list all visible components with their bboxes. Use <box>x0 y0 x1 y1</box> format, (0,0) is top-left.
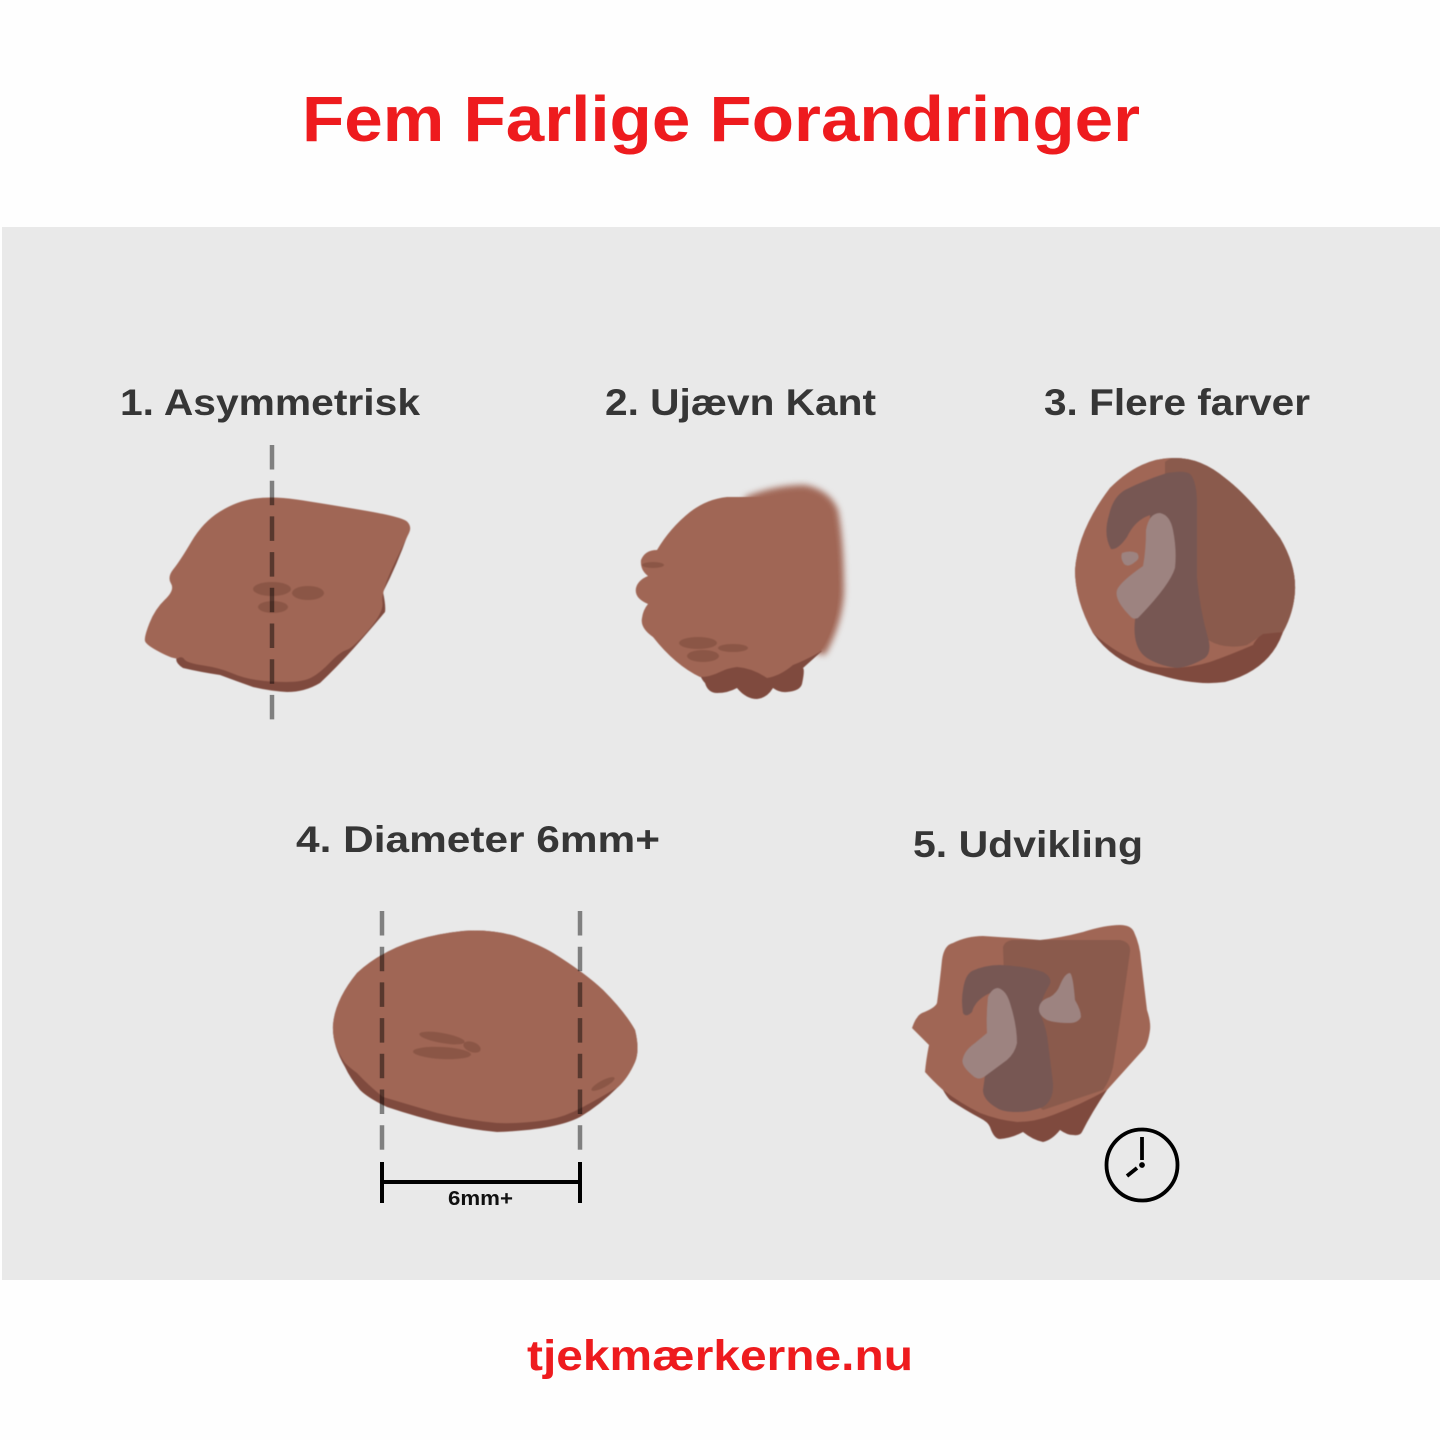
grey panel <box>2 227 1440 1280</box>
symmetry axis dashed line <box>270 445 274 720</box>
pale zone right <box>1039 973 1081 1023</box>
purple zone <box>1106 472 1209 668</box>
purple zone <box>962 965 1053 1112</box>
mole 3: multiple colours <box>1075 458 1295 683</box>
mole 5: evolution <box>912 925 1150 1142</box>
heading: 3. Flere farver: 3. Flere farver <box>1044 382 1310 423</box>
brown zone <box>1003 940 1130 1110</box>
heading: 4. Diameter 6mm+: 4. Diameter 6mm+ <box>296 819 660 860</box>
diameter guide lines <box>382 911 580 1150</box>
pale dot <box>1121 552 1139 566</box>
heading: 2. Ujævn Kant: 2. Ujævn Kant <box>605 382 876 423</box>
pale zone <box>1117 513 1176 619</box>
footer link: tjekmærkerne.nu <box>527 1332 913 1380</box>
pale zone left <box>962 988 1017 1079</box>
brown zone <box>1165 458 1295 647</box>
title: Fem Farlige Forandringer <box>302 83 1140 155</box>
heading: 5. Udvikling: 5. Udvikling <box>913 824 1143 865</box>
measure label: 6mm+ <box>448 1188 513 1210</box>
mole 1: asymmetric <box>145 497 410 692</box>
mole 2: uneven border <box>636 485 844 699</box>
spots <box>413 1029 616 1093</box>
heading: 1. Asymmetrisk: 1. Asymmetrisk <box>120 382 420 423</box>
spots <box>642 562 748 662</box>
measure bar <box>382 1162 580 1203</box>
icon: clock <box>1106 1130 1178 1200</box>
mole 4: diameter <box>333 931 638 1132</box>
spots <box>253 582 324 613</box>
